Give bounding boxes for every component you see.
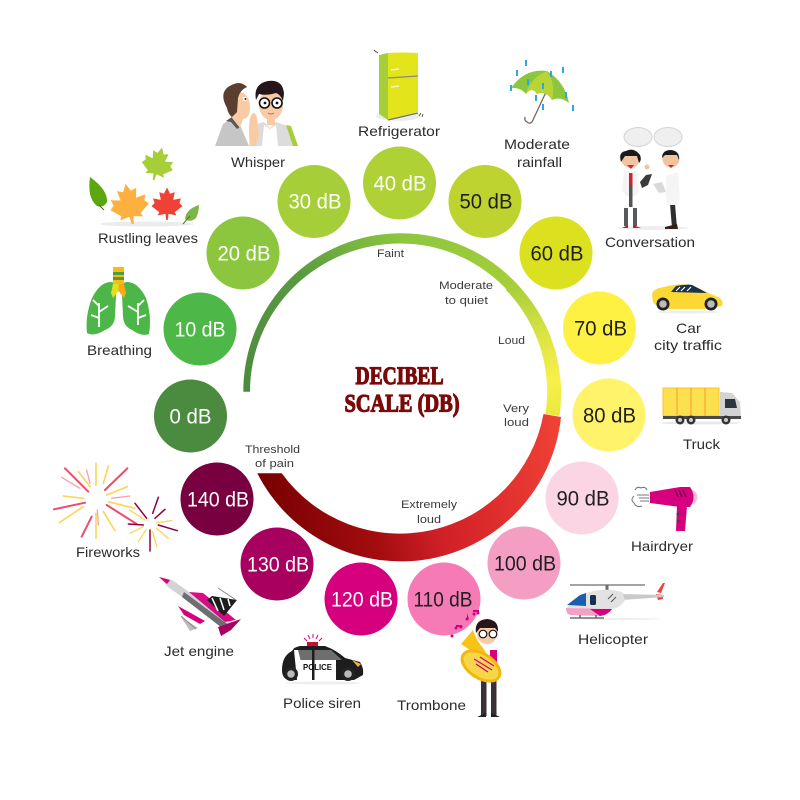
ring labels: loud bbox=[417, 514, 441, 526]
circle: 60 dB: 60 dB bbox=[530, 242, 584, 266]
label: jet engine: Jet engine bbox=[164, 643, 234, 659]
ring labels: loud bbox=[504, 417, 529, 429]
label: breathing: Breathing bbox=[87, 342, 152, 358]
title: DECIBEL bbox=[356, 363, 444, 390]
circle: 30 dB bbox=[278, 165, 350, 238]
circle: 40 dB: 40 dB bbox=[374, 172, 426, 196]
ring: scale arc bbox=[243, 233, 561, 561]
icon: fireworks bbox=[54, 463, 177, 551]
label: moderate rainfall: Moderate bbox=[504, 136, 570, 152]
icon: whisper bbox=[215, 81, 298, 146]
label: trombone: Trombone bbox=[397, 697, 466, 713]
circle: 130 dB: 130 dB bbox=[247, 554, 309, 576]
label: refrigerator: Refrigerator bbox=[358, 123, 440, 139]
circle: 120 dB bbox=[324, 562, 398, 636]
ring labels: Loud bbox=[498, 335, 525, 347]
icon: police car bbox=[282, 634, 363, 684]
icon: hairdryer bbox=[632, 487, 698, 531]
circle: 60 dB bbox=[520, 216, 592, 290]
circle: 0 dB bbox=[154, 380, 227, 452]
ring labels: Extremely bbox=[401, 499, 458, 511]
label: truck: Truck bbox=[683, 436, 721, 452]
icon: car bbox=[652, 284, 723, 314]
circle: 40 dB bbox=[363, 146, 436, 220]
icon: moderate rainfall umbrella bbox=[510, 60, 574, 123]
icon: refrigerator bbox=[374, 50, 423, 121]
icon: conversation bbox=[616, 128, 688, 230]
circle: 140 dB: 140 dB bbox=[187, 488, 249, 512]
ring labels bbox=[245, 248, 530, 526]
label: moderate rainfall: rainfall bbox=[517, 154, 562, 170]
label: police siren: Police siren bbox=[283, 695, 361, 711]
circle: 50 dB bbox=[448, 165, 522, 238]
label: helicopter: Helicopter bbox=[578, 631, 648, 647]
icon: jet engine bbox=[159, 577, 241, 636]
title: SCALE (DB) bbox=[344, 390, 460, 418]
label: conversation: Conversation bbox=[605, 234, 695, 250]
icon: police car: POLICE bbox=[303, 662, 332, 672]
circle: 100 dB bbox=[488, 526, 560, 600]
ring labels: Threshold bbox=[245, 444, 300, 456]
label: moderate rainfall bbox=[504, 136, 570, 170]
ring labels: Very bbox=[503, 403, 530, 415]
circle: 10 dB bbox=[164, 292, 236, 366]
circle: 70 dB bbox=[563, 292, 636, 364]
circle: 80 dB bbox=[572, 378, 646, 452]
ring labels: of pain bbox=[255, 458, 294, 470]
circle: 110 dB: 110 dB bbox=[414, 588, 472, 612]
circle: 20 dB bbox=[206, 216, 280, 290]
circle: 90 dB bbox=[546, 462, 618, 534]
label: rustling leaves: Rustling leaves bbox=[98, 230, 198, 246]
label: car city traffic bbox=[654, 320, 722, 353]
title bbox=[344, 363, 460, 418]
label: fireworks: Fireworks bbox=[76, 544, 140, 560]
icon: rustling leaves bbox=[89, 143, 199, 228]
circle: 90 dB: 90 dB bbox=[556, 488, 610, 510]
ring labels: to quiet bbox=[445, 295, 488, 307]
circle: 120 dB: 120 dB bbox=[331, 588, 393, 612]
circle: 130 dB bbox=[240, 528, 314, 600]
circle: 70 dB: 70 dB bbox=[574, 318, 627, 340]
circle: 50 dB: 50 dB bbox=[460, 190, 512, 214]
circle: 100 dB: 100 dB bbox=[494, 552, 556, 576]
icon: lungs bbox=[87, 267, 150, 335]
label: hairdryer: Hairdryer bbox=[631, 538, 693, 554]
circle: 30 dB: 30 dB bbox=[288, 190, 342, 214]
circle: 140 dB bbox=[180, 462, 254, 536]
circle: 20 dB: 20 dB bbox=[218, 242, 270, 266]
circle: 10 dB: 10 dB bbox=[174, 318, 226, 342]
icon: truck bbox=[660, 388, 741, 424]
label: whisper: Whisper bbox=[231, 154, 285, 170]
circle: 80 dB: 80 dB bbox=[583, 404, 636, 428]
label: car city traffic: Car bbox=[676, 320, 701, 336]
icon: helicopter bbox=[566, 583, 665, 620]
circle: 110 dB bbox=[408, 562, 480, 636]
label: car city traffic: city traffic bbox=[654, 337, 722, 353]
ring labels: Faint bbox=[377, 248, 404, 260]
icon: trombone player bbox=[450, 610, 505, 717]
circle: 0 dB: 0 dB bbox=[170, 406, 212, 428]
ring labels: Moderate bbox=[439, 280, 493, 292]
